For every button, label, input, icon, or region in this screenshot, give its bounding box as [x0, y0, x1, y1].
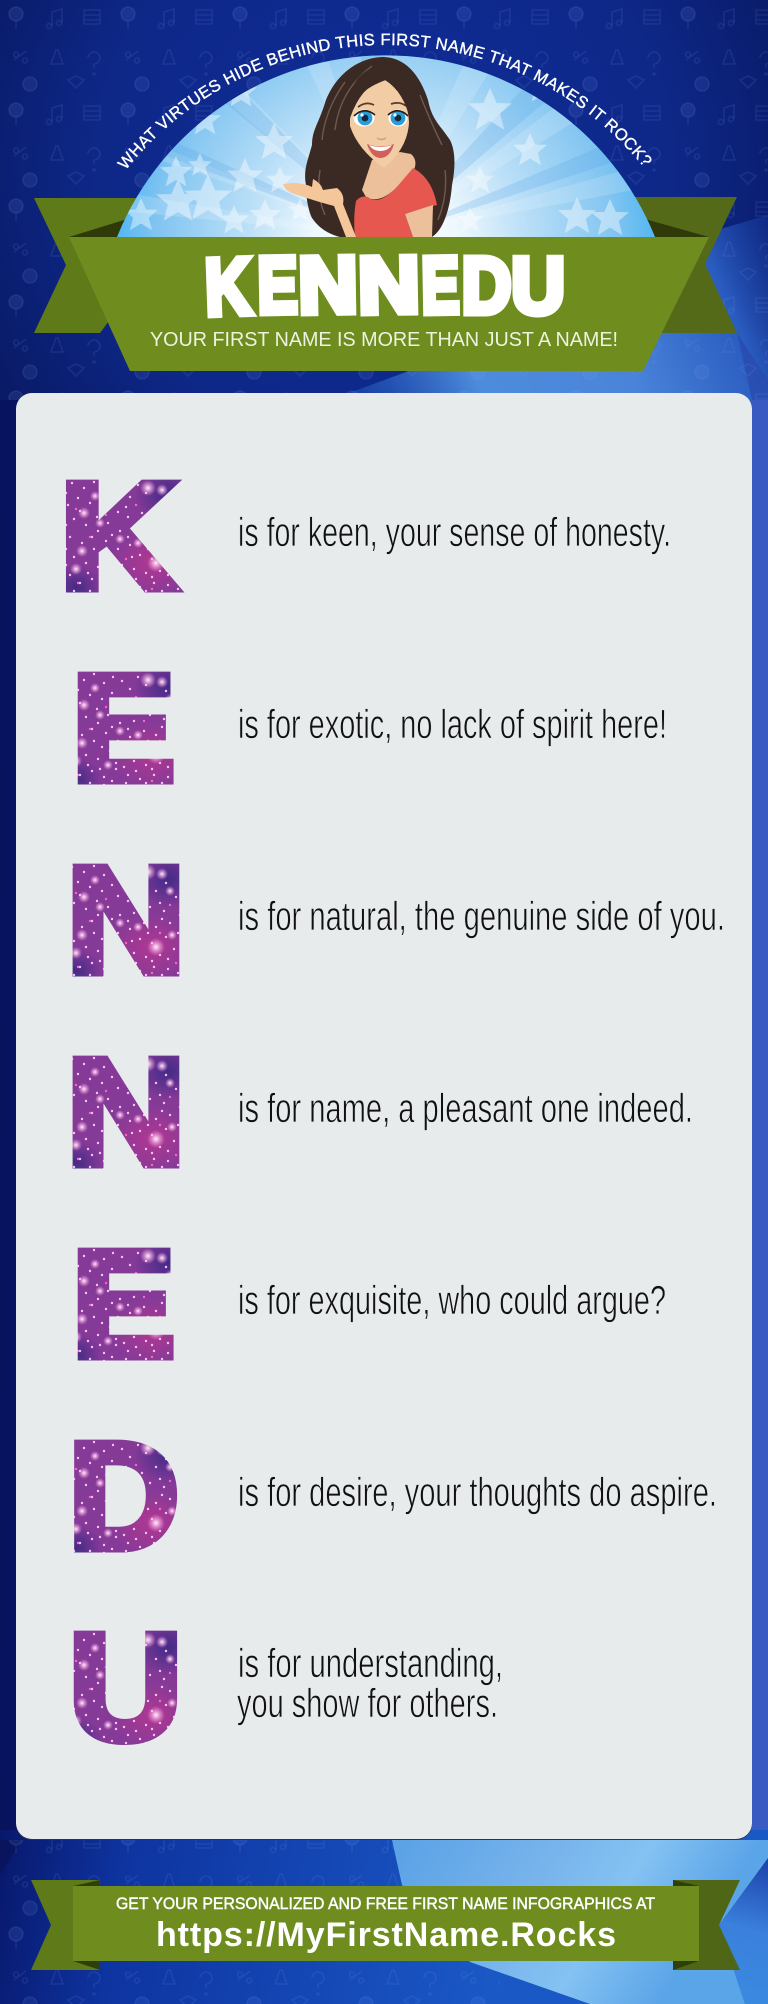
row: D: [68, 1411, 717, 1580]
title: E: [421, 240, 460, 330]
letter E: E: [72, 643, 175, 812]
title: D: [462, 240, 511, 330]
footer right tail: [673, 1880, 740, 1970]
letter U: U: [69, 1602, 182, 1771]
right arm: [405, 205, 433, 237]
title: U: [511, 242, 565, 331]
dome with stars: [100, 50, 670, 240]
light rays: [129, 61, 631, 225]
nose: [377, 138, 386, 140]
character: woman: [283, 57, 454, 237]
footer ribbon: [31, 1880, 740, 1970]
letter N second: N: [66, 1027, 186, 1196]
title: K: [203, 242, 253, 333]
eyebrows: [358, 103, 406, 107]
letter E second: E: [72, 1219, 175, 1388]
face: [350, 80, 409, 168]
row: E second: [72, 1219, 666, 1388]
title: E: [257, 240, 298, 330]
mouth: [367, 144, 394, 158]
blue streaks: [166, 56, 610, 218]
footer line one: GET YOUR PERSONALIZED AND FREE FIRST NAME INFOGRAPHICS AT: [116, 1895, 655, 1913]
letter N: N: [66, 835, 186, 1004]
left arm and hand: [283, 179, 356, 237]
title: N: [357, 240, 421, 330]
letter K: K: [60, 451, 176, 620]
row: K: [60, 451, 671, 620]
right tail: [570, 197, 737, 333]
title: N: [297, 240, 359, 331]
footer folds: [73, 1880, 699, 1970]
main panel: [16, 393, 752, 1840]
row: E: [72, 643, 667, 812]
neck and chest: [362, 152, 415, 199]
line U: you show for others.: [237, 1680, 498, 1726]
left fold: [69, 212, 150, 237]
shirt: [354, 168, 437, 237]
title: [203, 240, 565, 333]
right fold: [620, 212, 709, 237]
hair fringe: [349, 66, 410, 120]
stars: [124, 76, 629, 235]
row: U: [69, 1602, 503, 1771]
main banner: [69, 237, 709, 371]
footer left tail: [31, 1880, 100, 1970]
footer banner: [73, 1886, 699, 1961]
footer url: https://MyFirstName.Rocks: [156, 1916, 616, 1954]
header tagline arc: WHAT VIRTUES HIDE BEHIND THIS FIRST NAME THAT MAKES IT ROCK?: [116, 34, 652, 168]
eyes: [354, 110, 408, 126]
subtitle: YOUR FIRST NAME IS MORE THAN JUST A NAME!: [150, 328, 618, 351]
letter D: D: [68, 1411, 179, 1580]
row: N second: [66, 1027, 693, 1196]
hair highlights: [319, 66, 446, 220]
hair: [305, 57, 454, 237]
left tail: [34, 198, 200, 333]
row: N: [66, 835, 725, 1004]
line U: is for understanding,: [238, 1640, 503, 1686]
line U: [237, 1640, 503, 1726]
ribbon tails: [34, 197, 737, 333]
